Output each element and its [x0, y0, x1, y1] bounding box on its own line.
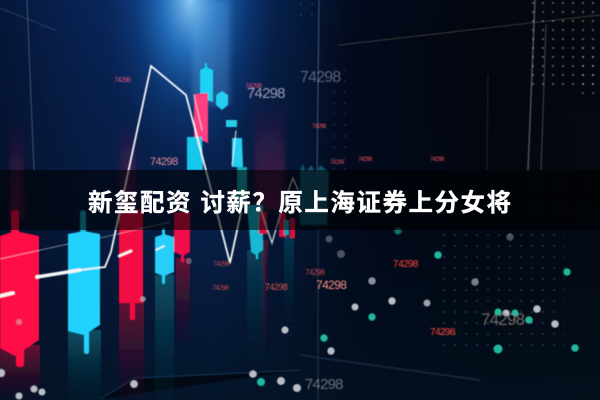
label: red numbers: 74298	[330, 160, 345, 166]
candle: hexagon blue	[216, 91, 228, 110]
lower candle reflections	[0, 235, 294, 400]
candle: large red left	[0, 210, 39, 367]
candle: small blue bar	[226, 120, 237, 127]
label: red numbers: 74298	[430, 327, 456, 338]
candle: blue below band	[247, 205, 263, 259]
candle: central blue	[187, 137, 203, 170]
label: red numbers: 74298	[265, 282, 288, 292]
label: red numbers: 74298	[316, 278, 347, 292]
candle: teal	[237, 167, 247, 207]
label: red numbers: 74298	[212, 285, 229, 292]
line chart	[0, 66, 298, 296]
scattered bubbles	[0, 227, 579, 400]
label: grey numbers: 74298	[300, 69, 341, 86]
label: red numbers: 74298	[358, 157, 373, 163]
grey bubbles	[0, 233, 559, 400]
label: red numbers: 74298	[393, 259, 419, 270]
candle: red middle	[119, 210, 143, 320]
candle: small red cluster	[259, 212, 295, 238]
label: red numbers: 74298	[150, 156, 178, 168]
label: grey numbers	[247, 69, 525, 393]
label: grey numbers: 74298	[305, 376, 343, 393]
candle: small blue	[155, 228, 174, 284]
label: red numbers: 74298	[213, 261, 230, 268]
label: red numbers	[114, 77, 456, 338]
candle: large blue	[68, 210, 100, 354]
teal bubbles	[257, 227, 579, 386]
title band	[0, 170, 600, 230]
candle: right blue	[232, 138, 243, 167]
label: red numbers: 74298	[305, 268, 325, 277]
label: red numbers: 74298	[430, 157, 445, 163]
candle: teal cluster	[284, 164, 329, 235]
label: grey numbers: 74298	[247, 85, 285, 102]
title: 新玺配资 讨薪？原上海证券上分女将	[88, 189, 511, 217]
label: grey numbers: 74298	[481, 310, 525, 329]
label: red numbers: 74298	[114, 77, 131, 84]
label: red numbers: 74298	[245, 83, 262, 90]
label: red numbers: 74298	[312, 124, 327, 130]
candle: upper blue	[200, 63, 213, 103]
candle: upper pink	[194, 93, 208, 143]
chart: candlesticks	[0, 63, 329, 367]
candle: red right of small blue	[174, 212, 190, 262]
number labels	[114, 69, 525, 393]
